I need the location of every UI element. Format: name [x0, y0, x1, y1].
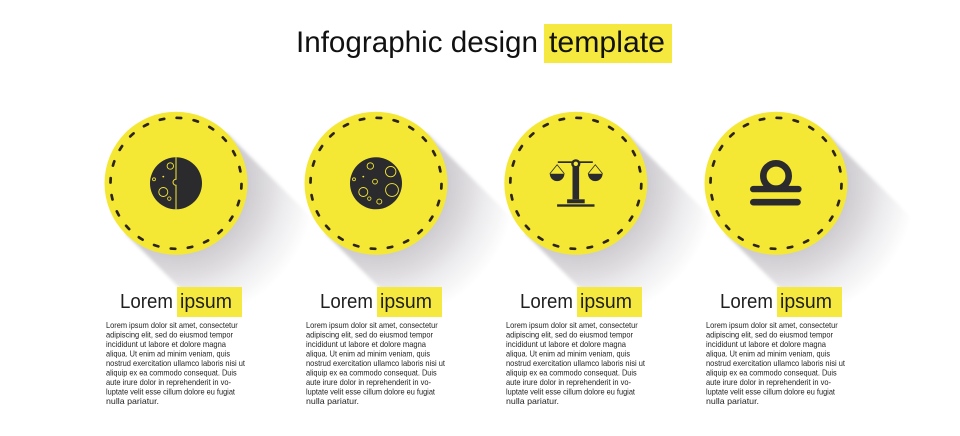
dashed ring: [310, 117, 442, 249]
body text: incididunt ut labore et dolore magna: [306, 339, 426, 349]
body text: incididunt ut labore et dolore magna: [506, 339, 626, 349]
body text: aute irure dolor in reprehenderit in vo-: [106, 377, 231, 387]
panel: step 3 scales: [504, 112, 726, 406]
icon: libra zodiac sign: [750, 163, 802, 206]
body text: nulla pariatur.: [506, 396, 559, 406]
body text: adipiscing elit, sed do eiusmod tempor: [706, 330, 833, 340]
body text: aliquip ex ea commodo consequat. Duis: [106, 368, 237, 378]
body text: adipiscing elit, sed do eiusmod tempor: [306, 330, 433, 340]
icon: half moon: [150, 157, 202, 209]
yellow circle: [504, 112, 647, 255]
dashed ring: [710, 117, 842, 249]
heading: Lorem: [720, 290, 773, 313]
title text: Infographic design: [296, 26, 538, 59]
heading highlighted word: ipsum: [580, 290, 632, 313]
heading highlighted word: ipsum: [380, 290, 432, 313]
panel: step 4 libra: [704, 112, 926, 406]
body text: [506, 320, 646, 406]
body text: aute irure dolor in reprehenderit in vo-: [306, 377, 431, 387]
heading highlighted word: ipsum: [780, 290, 832, 313]
long shadow: [726, 133, 926, 333]
heading highlighted word: ipsum: [180, 290, 232, 313]
heading: Lorem: [520, 290, 573, 313]
body text: aliqua. Ut enim ad minim veniam, quis: [306, 348, 430, 358]
body text: aute irure dolor in reprehenderit in vo-: [706, 377, 831, 387]
body text: nostrud exercitation ullamco laboris nisi ut: [306, 358, 446, 368]
panel: step 2 full moon: [304, 112, 526, 406]
body text: [306, 320, 446, 406]
long shadow: [326, 133, 526, 333]
body text: aliqua. Ut enim ad minim veniam, quis: [506, 348, 630, 358]
body text: [106, 320, 246, 406]
body text: aliqua. Ut enim ad minim veniam, quis: [706, 348, 830, 358]
heading highlight: [577, 287, 642, 317]
body text: adipiscing elit, sed do eiusmod tempor: [506, 330, 633, 340]
body text: aute irure dolor in reprehenderit in vo-: [506, 377, 631, 387]
heading: Lorem: [320, 290, 373, 313]
heading highlight: [177, 287, 242, 317]
body text: Lorem ipsum dolor sit amet, consectetur: [706, 320, 838, 330]
body text: nulla pariatur.: [306, 396, 359, 406]
icon: moon with craters: [350, 157, 402, 209]
long shadow: [525, 133, 726, 333]
heading: Lorem: [120, 290, 173, 313]
body text: incididunt ut labore et dolore magna: [706, 339, 826, 349]
title: [296, 24, 672, 63]
yellow circle: [304, 112, 448, 255]
yellow circle: [104, 112, 248, 255]
body text: luptate velit esse cillum dolore eu fugiat: [306, 386, 436, 396]
body text: aliquip ex ea commodo consequat. Duis: [706, 368, 837, 378]
body text: nostrud exercitation ullamco laboris nisi ut: [706, 358, 846, 368]
body text: incididunt ut labore et dolore magna: [106, 339, 226, 349]
body text: Lorem ipsum dolor sit amet, consectetur: [106, 320, 238, 330]
dashed ring: [110, 117, 242, 249]
body text: aliquip ex ea commodo consequat. Duis: [506, 368, 637, 378]
body text: luptate velit esse cillum dolore eu fugiat: [106, 386, 236, 396]
body text: nulla pariatur.: [706, 396, 759, 406]
body text: luptate velit esse cillum dolore eu fugiat: [506, 386, 636, 396]
icon: scales of justice: [550, 159, 603, 207]
heading highlight: [377, 287, 442, 317]
title highlighted word: template: [549, 26, 665, 59]
body text: aliqua. Ut enim ad minim veniam, quis: [106, 348, 230, 358]
dashed ring: [510, 117, 642, 249]
title highlight: [544, 24, 672, 63]
body text: nostrud exercitation ullamco laboris nisi ut: [106, 358, 246, 368]
body text: Lorem ipsum dolor sit amet, consectetur: [506, 320, 638, 330]
heading highlight: [777, 287, 842, 317]
long shadow: [126, 133, 326, 333]
body text: nostrud exercitation ullamco laboris nisi ut: [506, 358, 646, 368]
body text: adipiscing elit, sed do eiusmod tempor: [106, 330, 233, 340]
body text: [706, 320, 846, 406]
body text: Lorem ipsum dolor sit amet, consectetur: [306, 320, 438, 330]
yellow circle: [704, 112, 848, 255]
body text: nulla pariatur.: [106, 396, 159, 406]
panel: step 1 half moon: [104, 112, 326, 406]
body text: luptate velit esse cillum dolore eu fugiat: [706, 386, 836, 396]
body text: aliquip ex ea commodo consequat. Duis: [306, 368, 437, 378]
